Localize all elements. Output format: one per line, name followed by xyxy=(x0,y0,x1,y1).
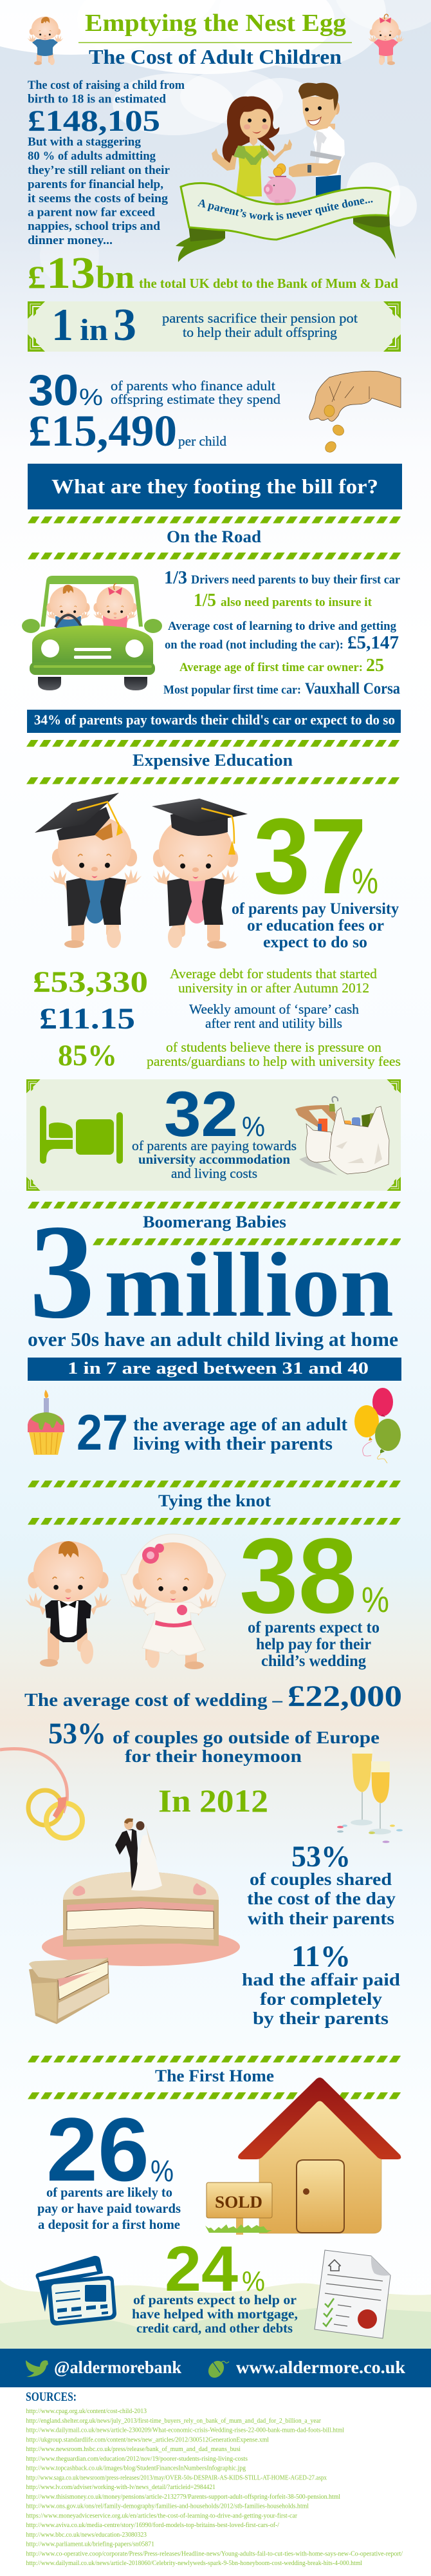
stat: 3 million: 3 xyxy=(30,1197,95,1347)
illustration: groom baby xyxy=(25,1541,111,1667)
intro text: But with a staggering xyxy=(28,135,141,149)
intro text: nappies, school trips and xyxy=(28,220,160,233)
panel: 1 in 3: 1 xyxy=(51,300,73,350)
piggy bank xyxy=(264,176,296,205)
car statistics: Vauxhall Corsa xyxy=(305,680,400,697)
hills at bottom xyxy=(0,2280,431,2349)
stat: 26%: 26 xyxy=(46,2099,149,2200)
stat: 30% xyxy=(28,366,281,455)
stat: 85% xyxy=(58,1039,401,1072)
stat: 53% shared: the cost of the day xyxy=(247,1889,396,1908)
sources list: http://www.cpag.org.uk/content/cost-child-2013 xyxy=(26,2408,147,2415)
callout: 1 in 7 xyxy=(28,1358,401,1381)
graduate boy xyxy=(35,793,142,948)
footer band xyxy=(0,2349,431,2387)
background clouds xyxy=(0,0,431,285)
graduate girl xyxy=(152,799,248,949)
stat: 32%: university accommodation xyxy=(138,1151,290,1167)
sources list: http://www.aviva.co.uk/media-centre/story/16990/ford-models-top-britains-best-loved-first-cars-of-/ xyxy=(26,2522,279,2529)
icon: cupcake xyxy=(28,1390,64,1455)
stat: 3 million: million xyxy=(104,1234,394,1336)
stat: £53,330 xyxy=(33,965,378,999)
intro text: 80 % of adults admitting xyxy=(28,149,156,163)
stat: 53% shared: 53% xyxy=(291,1840,351,1873)
intro text: The cost of raising a child from xyxy=(28,79,185,92)
stat: 30%: 30 xyxy=(28,366,78,415)
illustration: graduate babies xyxy=(35,793,248,949)
stat: 32%: % xyxy=(242,1111,265,1142)
intro text: parents for financial help, xyxy=(28,178,163,191)
stat: 32%: and living costs xyxy=(171,1166,257,1181)
subtitle: The Cost of Adult Children xyxy=(89,45,342,68)
stat: £13bn: bn xyxy=(96,259,134,295)
stat: average wedding cost xyxy=(24,1680,402,1713)
heading: what are they footing the bill for xyxy=(28,464,402,509)
stat: £53,330: Average debt for students that started xyxy=(170,966,378,981)
stat: 27: living with their parents xyxy=(133,1434,333,1454)
stat: 11% paid xyxy=(242,1940,400,2028)
stat: honeymoon: for their honeymoon xyxy=(125,1747,302,1766)
callout: 34% of parents xyxy=(27,710,401,733)
stat: 26%: % xyxy=(151,2154,174,2188)
stat: £13bn: £ xyxy=(28,259,46,295)
stat: 30%: % xyxy=(79,384,103,410)
stat: 27: 27 xyxy=(77,1404,128,1461)
car statistics: 1/3 xyxy=(164,567,187,588)
car statistics: £5,147 xyxy=(347,632,399,653)
stat: 30%: £15,490 xyxy=(28,406,177,455)
icon: bags and hanger xyxy=(295,1097,389,1175)
stat: 85%: 85% xyxy=(58,1039,117,1072)
twitter handle: @aldermorebank xyxy=(54,2358,181,2377)
stat: 38% xyxy=(239,1517,389,1670)
sources list: http://www.ons.gov.uk/ons/rel/family-demography/families-and-households/2012/stb-families-households.html xyxy=(26,2503,309,2510)
car statistics: Most popular first time car: xyxy=(163,683,301,697)
section heading: boomerang babies: Boomerang Babies xyxy=(143,1213,286,1231)
intro text: they’re still reliant on their xyxy=(28,164,170,177)
sources heading: SOURCES: xyxy=(26,2390,77,2404)
stat: 27: the average age of an adult xyxy=(133,1414,347,1435)
illustration: bride baby xyxy=(121,1534,226,1669)
cake toppers: bride and groom xyxy=(115,1818,162,1891)
stat: 11% paid: for completely xyxy=(260,1989,383,2009)
stat: 53% shared xyxy=(247,1840,396,1928)
stat: 38%: of parents expect to xyxy=(248,1619,380,1636)
panel: 1 in 3: in xyxy=(80,313,108,347)
stat: 3 million xyxy=(28,1197,398,1350)
sources list: http://www.theguardian.com/education/2012/nov/19/poorer-students-rising-living-costs xyxy=(26,2456,248,2463)
car statistics: 1/5 xyxy=(194,590,216,611)
icon: balloons xyxy=(354,1388,401,1463)
panel: 1 in 3: 3 xyxy=(113,300,136,350)
coins xyxy=(273,164,286,176)
section heading: expensive education: Expensive Education xyxy=(133,751,293,770)
panel: 1 in 3: parents sacrifice their pension pot xyxy=(162,310,358,326)
sources list xyxy=(26,2408,403,2567)
stat: 53% shared: of couples shared xyxy=(250,1870,392,1889)
sources list: http://www.thisismoney.co.uk/money/pensions/article-2132779/Parents-support-adult-offspring-forfeit-38-500-pension.html xyxy=(26,2494,340,2501)
stat: honeymoon: of couples go outside of Europe xyxy=(113,1728,380,1747)
heading: what are they footing the bill for: What are they footing the bill for? xyxy=(51,475,378,498)
stat: 53% shared: with their parents xyxy=(248,1909,394,1928)
stat: 30%: per child xyxy=(178,433,226,449)
stat: 37%: % xyxy=(352,860,378,901)
stat: 24%: 24 xyxy=(165,2233,238,2304)
icon: champagne glasses xyxy=(337,1747,403,1843)
icon: computer mouse xyxy=(205,2358,229,2381)
sources list: http://www.newsroom.hsbc.co.uk/press/release/bank_of_mum_and_dad_means_busi xyxy=(26,2446,241,2453)
icon: contract document xyxy=(315,2250,390,2338)
section heading: tying the knot: Tying the knot xyxy=(158,1492,271,1510)
banner: a parent's work: A parent’s work is never quite done... xyxy=(197,198,373,220)
stat: £13bn xyxy=(28,249,398,298)
car statistics: Average age of first time car owner: xyxy=(179,661,363,674)
website address: www.aldermore.co.uk xyxy=(236,2358,405,2377)
icon: credit cards xyxy=(36,2256,116,2325)
icon: girl baby xyxy=(368,14,405,65)
callout: 1 in 7: 1 in 7 are aged between 31 and 40 xyxy=(68,1359,369,1378)
illustration: wedding cake xyxy=(29,1818,240,2024)
stat: 38%: child’s wedding xyxy=(261,1653,366,1670)
stat: 26%: a deposit for a first home xyxy=(38,2217,180,2232)
car statistics: 25 xyxy=(366,655,384,676)
intro text: dinner money... xyxy=(28,234,113,247)
car statistics: Drivers need parents to buy their first car xyxy=(191,573,401,587)
icon: bed xyxy=(40,1106,123,1164)
heading: in 2012: In 2012 xyxy=(158,1783,268,1819)
stat: 37%: expect to do so xyxy=(263,934,367,951)
stat: 26% xyxy=(37,2099,181,2232)
sold sign xyxy=(206,2183,272,2235)
stat: 26%: of parents are likely to xyxy=(46,2184,172,2200)
stat: 27 xyxy=(77,1404,347,1461)
stat: 38%: 38 xyxy=(239,1517,357,1636)
car statistics xyxy=(163,567,401,697)
sources list: http://www.dailymail.co.uk/news/article-2018060/Celebrity-newlyweds-spark-9-5bn-honeyboom-cost-wedding-break-hits-4-000.html xyxy=(26,2560,362,2567)
stat: £11.15: after rent and utility bills xyxy=(205,1016,342,1031)
stat: 24%: % xyxy=(242,2266,265,2297)
stat: 37% xyxy=(232,797,399,951)
stat: £11.15 xyxy=(39,1001,359,1036)
sources list: http://www.dailymail.co.uk/news/article-2300209/What-economic-crisis-Wedding-rises-22-000-bank-mum-dad-foots-bill.html xyxy=(26,2427,344,2434)
panel: 1 in 3: to help their adult offspring xyxy=(183,325,338,340)
sources list: http://www.co-operative.coop/corporate/Press/Press-releases/Headline-news/Young-adults-fail-to-cut-ties-with-home-says-new-Co-operative-report/ xyxy=(26,2550,403,2557)
sources list: http://www.topcashback.co.uk/images/blog/StudentFinancesInNumbersInfographic.jpg xyxy=(26,2465,246,2472)
car statistics: on the road (not including the car): xyxy=(165,638,344,652)
section heading: on the road: On the Road xyxy=(167,527,262,546)
sources list: http://ukgroup.standardlife.com/content/news/new_articles/2012/300512GenerationExpense.xml xyxy=(26,2436,269,2443)
title: Emptying the Nest Egg xyxy=(85,10,346,37)
stat: 11% paid: had the affair paid xyxy=(242,1970,400,1989)
sources list: http://www.parliament.uk/briefing-papers/sn05871 xyxy=(26,2541,154,2548)
stat: 37%: 37 xyxy=(253,797,367,916)
icon: rings and ribbon xyxy=(0,1749,82,1838)
intro text: it seems the costs of being xyxy=(28,192,169,205)
stat: £53,330: university in or after Autumn 2012 xyxy=(178,980,369,996)
stat: £11.15: Weekly amount of ‘spare’ cash xyxy=(189,1001,359,1017)
stat: 24%: of parents expect to help or xyxy=(133,2292,297,2307)
stat: 30%: offspring estimate they spend xyxy=(111,392,281,407)
sources list: http://www.lv.com/adviser/working-with-lv/news_detail/?articleid=2984421 xyxy=(26,2484,216,2491)
illustration: house with sold sign xyxy=(205,2078,401,2235)
sources list: http://www.bbc.co.uk/news/education-23080323 xyxy=(26,2532,147,2539)
banner: a parent's work xyxy=(176,182,396,262)
sold sign: SOLD xyxy=(215,2193,262,2211)
stat: £11.15: £11.15 xyxy=(39,1002,135,1036)
stat: 11% paid: by their parents xyxy=(253,2009,389,2028)
stat: £13bn: the total UK debt to the Bank of Mum & Dad xyxy=(139,276,398,291)
stat: average wedding cost: The average cost of wedding – xyxy=(24,1690,283,1710)
icon: boy baby xyxy=(27,17,64,65)
icon: hand dropping coins xyxy=(309,371,401,455)
icon: twitter bird xyxy=(26,2360,48,2377)
intro text xyxy=(28,79,185,247)
callout: 34% of parents: 34% of parents pay towards their child's car or expect to do so xyxy=(34,712,395,728)
panel: 32% accommodation xyxy=(26,1078,401,1191)
stat: 37%: or education fees or xyxy=(247,917,384,934)
section heading: the first home: The First Home xyxy=(155,2067,274,2085)
sources list: http://www.saga.co.uk/newsroom/press-releases/2013/may/OVER-50s-DESPAIR-AS-KIDS-STILL-AT-HOME-AGED-27.aspx xyxy=(26,2474,327,2481)
intro text: £148,105 xyxy=(28,104,160,138)
stat: 3 million: over 50s have an adult child living at home xyxy=(28,1328,398,1350)
car statistics: Average cost of learning to drive and getting xyxy=(168,620,396,633)
intro text: birth to 18 is an estimated xyxy=(28,93,166,106)
stat: honeymoon xyxy=(48,1717,380,1766)
stat: 37%: of parents pay University xyxy=(232,900,399,918)
woman xyxy=(212,97,292,196)
stat: 85%: of students believe there is pressure on xyxy=(166,1039,382,1055)
car statistics: also need parents to insure it xyxy=(221,596,372,609)
stat: 24% xyxy=(132,2233,298,2336)
stat: 32% xyxy=(132,1078,297,1181)
stat: £13bn: 13 xyxy=(46,249,95,298)
stat: 24%: have helped with mortgage, xyxy=(132,2306,298,2322)
sources list: https://www.moneyadviceservice.org.uk/en/articles/the-cost-of-learning-to-drive-and-getting-your-first-car xyxy=(26,2512,297,2519)
stat: 38%: % xyxy=(362,1579,389,1620)
stat: average wedding cost: £22,000 xyxy=(288,1680,402,1713)
stat: 11% paid: 11% xyxy=(291,1940,351,1973)
sources list: http://england.shelter.org.uk/news/july_2013/first-time_buyers_rely_on_bank_of_mum_and_dad_for_2_billion_a_year xyxy=(26,2418,321,2425)
illustration: parents with piggy bank xyxy=(212,83,345,205)
illustration: babies in green car xyxy=(22,576,162,690)
stat: £53,330: £53,330 xyxy=(33,965,148,999)
panel: 1 in 3 xyxy=(28,300,401,352)
stat: 38%: help pay for their xyxy=(256,1636,371,1653)
man xyxy=(289,83,345,200)
stat: 24%: credit card, and other debts xyxy=(136,2320,293,2336)
stat: 26%: pay or have paid towards xyxy=(37,2201,181,2216)
stat: 30%: of parents who finance adult xyxy=(111,378,275,393)
stat: 32%: 32 xyxy=(164,1078,238,1150)
stat: 32%: of parents are paying towards xyxy=(132,1138,297,1153)
stat: honeymoon: 53% xyxy=(48,1717,106,1750)
stat: 85%: parents/guardians to help with university fees xyxy=(147,1054,401,1069)
intro text: a parent now far exceed xyxy=(28,206,155,219)
cake slice xyxy=(29,1958,109,2024)
